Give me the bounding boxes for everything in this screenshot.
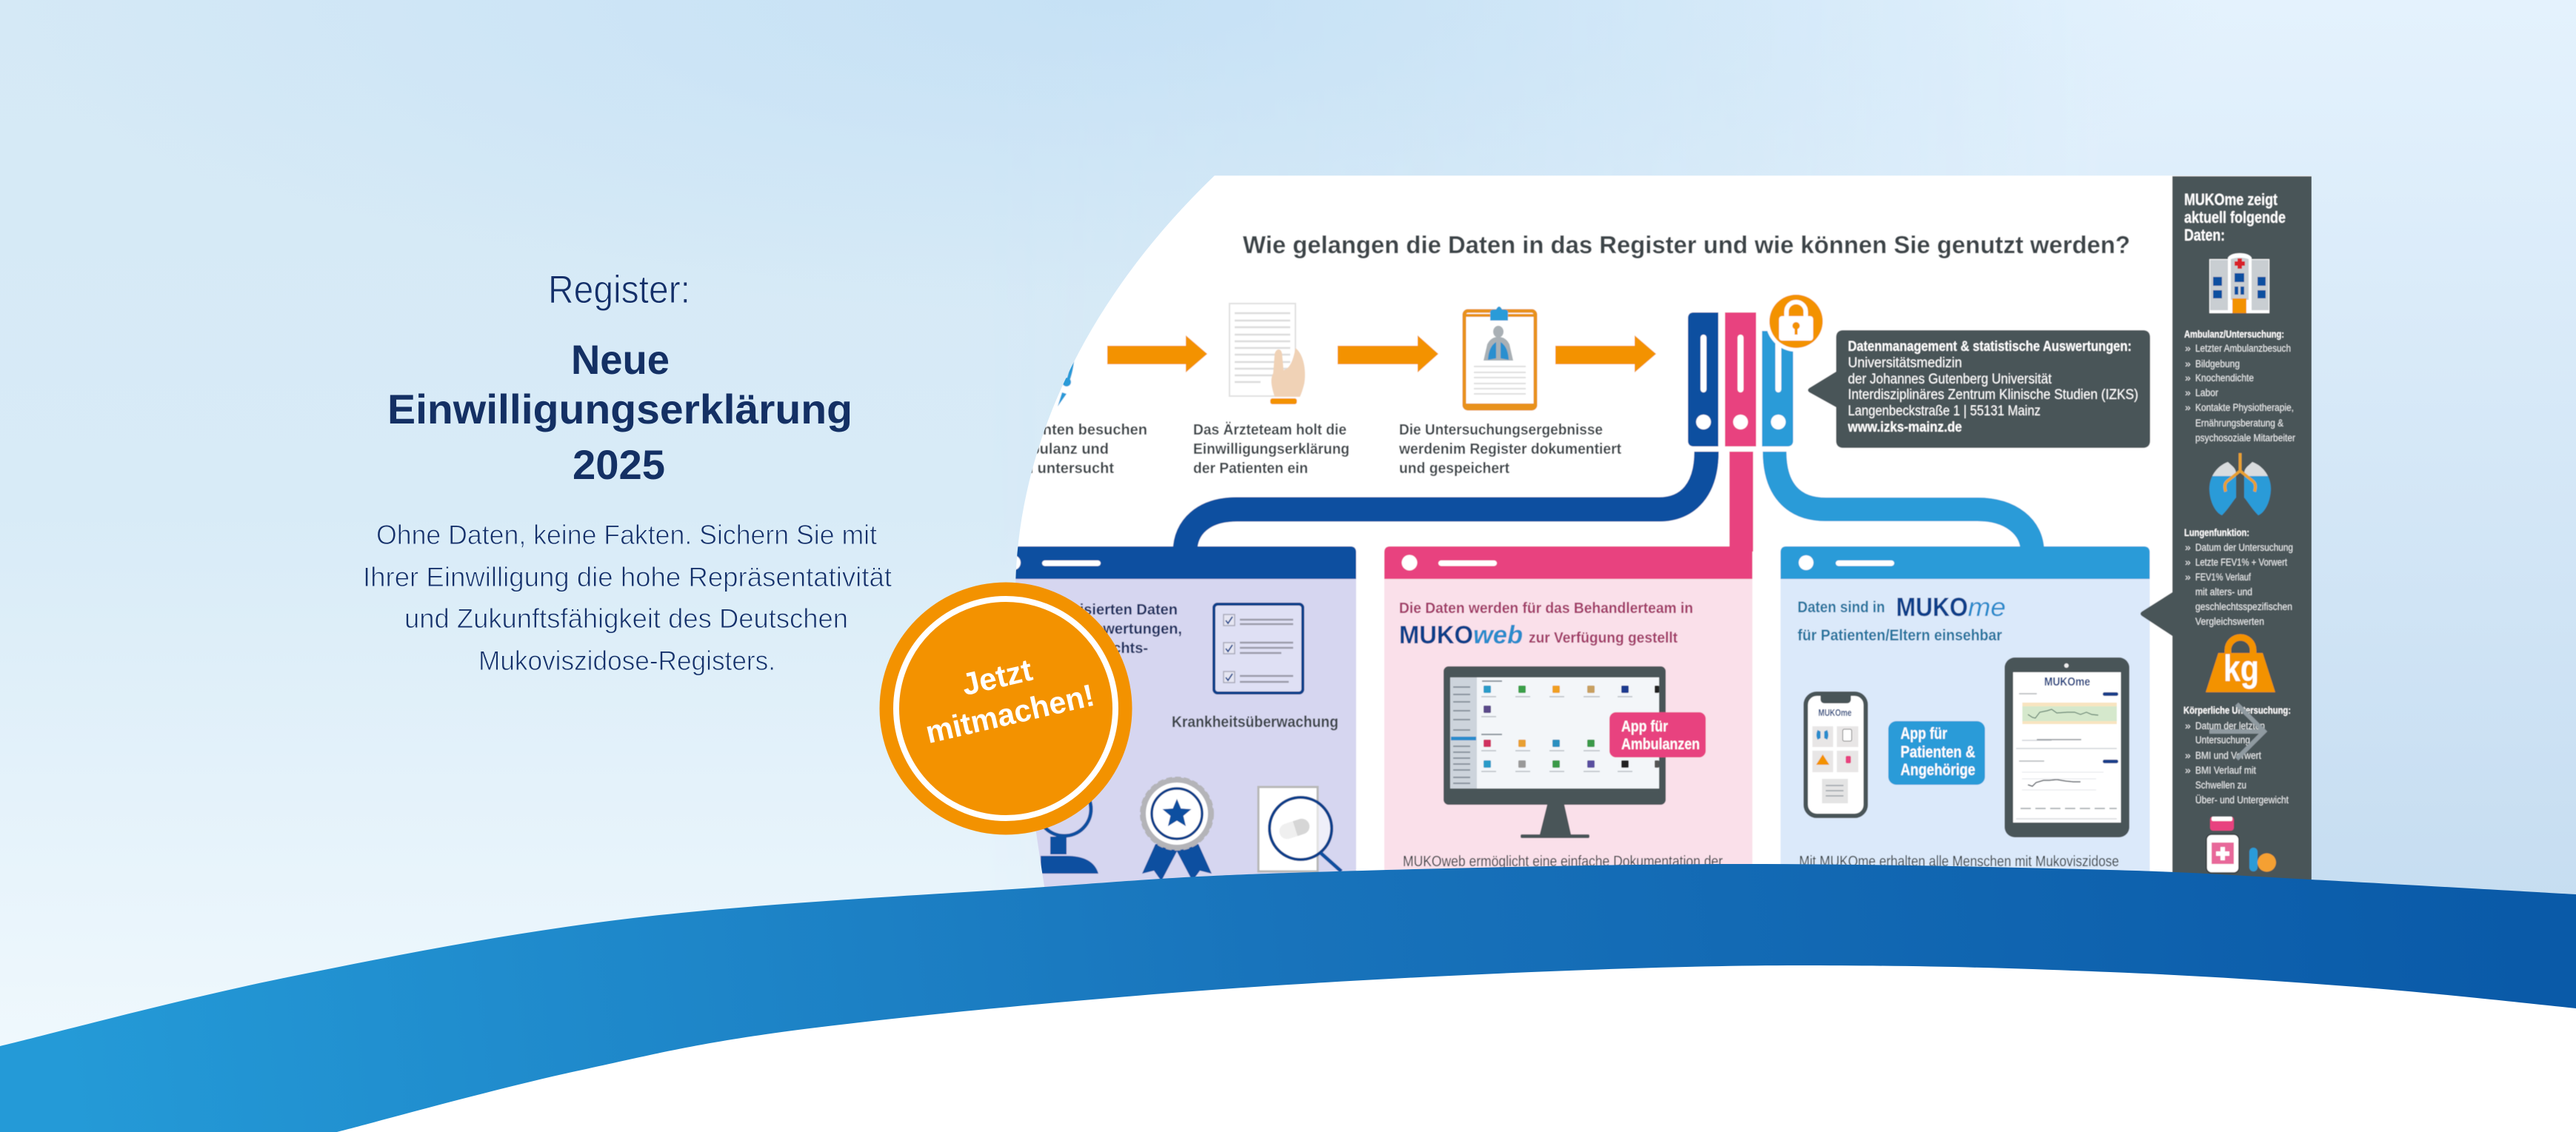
icon: patient fragment: [1058, 361, 1074, 406]
panel 3 heading: für Patienten/Eltern einsehbar: [1798, 627, 2002, 644]
logo: MUKOweb: web: [1473, 621, 1523, 649]
list: Ambulanz/Untersuchung: Ernährungsberatung &: [2195, 417, 2284, 429]
callout: App für Patienten & Angehörige: [1889, 721, 1985, 785]
list: Körperliche Untersuchung: BMI und Vorwert: [2195, 749, 2261, 761]
body text MUKOme: Mit MUKOme erhalten alle Menschen mit Mukoviszidose: [1799, 854, 2119, 870]
arrow 2: [1338, 335, 1438, 372]
icon: document with magnifier: [1258, 787, 1341, 871]
callout: data management: www.izks-mainz.de: [1847, 420, 1962, 435]
caption step 1: [1031, 423, 1147, 474]
icon: clipboard with lungs: [1464, 307, 1535, 409]
callout: data management: Universitätsmedizin: [1848, 355, 1962, 371]
callout: data management: der Johannes Gutenberg Universität: [1848, 372, 2052, 387]
caption step 3: und gespeichert: [1399, 460, 1509, 477]
callout: data management: Interdisziplinäres Zentrum Klinische Studien (IZKS): [1848, 387, 2138, 403]
heading: Neue Einwilligungserklärung 2025: [387, 336, 852, 488]
sidebar heading: MUKOme zeigt: [2184, 190, 2278, 209]
panel 2 heading: [1399, 600, 1693, 646]
icon: checklist: [1214, 604, 1303, 693]
connector: blue: [1185, 452, 1706, 552]
label: Krankheitsüberwachung: Krankheitsüberwachung: [1172, 714, 1338, 731]
sticker: Jetzt mitmachen: mitmachen!: [922, 677, 1098, 750]
eyebrow: Register: Register:: [548, 268, 690, 312]
list: Ambulanz/Untersuchung: Letzter Ambulanzbesuch: [2195, 342, 2291, 354]
callout: App für Ambulanzen: App für: [1621, 718, 1668, 735]
list: Lungenfunktion: »: [2185, 541, 2191, 553]
callout: data management: Datenmanagement & statistische Auswertungen:: [1848, 339, 2132, 355]
list: Lungenfunktion: FEV1% Verlauf: [2195, 571, 2251, 583]
body text MUKOweb: MUKOweb ermöglicht eine einfache Dokumentation der: [1403, 854, 1723, 870]
sticker: Jetzt mitmachen: Jetzt: [958, 652, 1035, 702]
logo: MUKOweb: MUKO: [1399, 621, 1473, 649]
caption step 2: Das Ärzteteam holt die: [1193, 421, 1347, 438]
list: Körperliche Untersuchung: Datum der letzten: [2195, 720, 2265, 731]
caption step 3: werdenim Register dokumentiert: [1398, 441, 1621, 458]
icon: binders: [1688, 312, 1793, 446]
icon: medal: [1141, 777, 1213, 881]
callout: App für Patienten & Angehörige: App für: [1901, 724, 1947, 743]
icon: kg weight: kg: [2223, 648, 2259, 689]
list: Ambulanz/Untersuchung: Bildgebung: [2195, 358, 2240, 369]
list: Ambulanz/Untersuchung: Knochendichte: [2195, 372, 2254, 384]
caption step 1: Patienten besuchen: [1007, 422, 1147, 438]
panel 2 heading: zur Verfügung gestellt: [1529, 630, 1678, 646]
sidebar heading: Daten:: [2184, 226, 2225, 244]
list: Lungenfunktion: Letzte FEV1% + Vorwert: [2195, 556, 2287, 568]
list: Ambulanz/Untersuchung: psychosoziale Mitarbeiter: [2195, 432, 2295, 443]
heading: Neue Einwilligungserklärung 2025: Einwilligungserklärung: [387, 386, 852, 432]
caption step 3: Die Untersuchungsergebnisse: [1399, 422, 1603, 438]
list: Ambulanz/Untersuchung: Kontakte Physiotherapie,: [2195, 401, 2294, 413]
list: Ambulanz/Untersuchung: »: [2185, 386, 2191, 398]
panel: Krankheitsüberwachung: [1015, 546, 1357, 887]
icon: kg weight: [2206, 637, 2275, 692]
icon: signed document with hand: [1229, 304, 1305, 404]
sidebar heading: aktuell folgende: [2184, 208, 2286, 227]
arrow 1: [1107, 335, 1207, 372]
list: Lungenfunktion: »: [2185, 556, 2191, 568]
callout: App für Patienten & Angehörige: Angehörige: [1901, 760, 1975, 779]
icon: hospital: [2209, 253, 2269, 313]
callout: App für Ambulanzen: [1609, 712, 1706, 757]
callout: App für Patienten & Angehörige: Patienten &: [1901, 743, 1975, 761]
panel: MUKOweb: [1384, 546, 1752, 903]
sticker: Jetzt mitmachen: [880, 582, 1132, 835]
infographic title: Wie gelangen die Daten in das Register und wie können Sie genutzt werden?: [1243, 231, 2130, 258]
list: Körperliche Untersuchung: »: [2185, 720, 2191, 731]
heading: Neue Einwilligungserklärung 2025: 2025: [573, 441, 665, 488]
callout: data management: [1808, 330, 2150, 448]
connector: teal: [1775, 452, 2032, 552]
panel 3 heading: Daten sind in: [1798, 599, 1885, 616]
icon: phone: [1806, 694, 1866, 816]
paragraph: Ohne Daten, keine Fakten. Sichern Sie mit: [376, 520, 878, 550]
sidebar heading: [2184, 190, 2286, 244]
caption step 1: werden untersucht: [981, 460, 1114, 477]
panel: MUKOme: [1781, 546, 2149, 903]
icon: slider arrow: [2209, 704, 2264, 759]
callout: data management: Langenbeckstraße 1 | 55131 Mainz: [1848, 403, 2041, 419]
list: Lungenfunktion: Lungenfunktion:: [2184, 526, 2249, 538]
panel 3 heading: [1798, 599, 2002, 644]
logo: MUKOme: MUKO: [1896, 593, 1968, 622]
list: Ambulanz/Untersuchung: »: [2185, 358, 2191, 369]
panel text: anonymisierten Daten: [1023, 602, 1178, 618]
list: Ambulanz/Untersuchung: Ambulanz/Untersuchung:: [2184, 328, 2284, 340]
list: Körperliche Untersuchung: BMI Verlauf mit: [2195, 764, 2256, 776]
caption step 1: die Ambulanz und: [982, 441, 1109, 458]
panel text: [1080, 603, 1182, 653]
paragraph: Mukoviszidose-Registers.: [478, 646, 775, 676]
logo: MUKOweb: [1399, 621, 1523, 649]
list: Körperliche Untersuchung: [2183, 704, 2291, 806]
icon: tablet: [2004, 657, 2129, 837]
list: Lungenfunktion: mit alters- und: [2195, 586, 2252, 597]
paragraph: und Zukunftsfähigkeit des Deutschen: [404, 603, 848, 634]
list: Körperliche Untersuchung: Über- und Untergewicht: [2195, 793, 2289, 806]
connector: pink: [1729, 452, 1753, 552]
icon: medicine bottle and pills: [2206, 817, 2276, 873]
list: Lungenfunktion: geschlechtsspezifischen: [2195, 600, 2292, 612]
paragraph: [363, 520, 892, 676]
infographic image clipped by arc: [981, 175, 2312, 903]
panel 2 heading: Die Daten werden für das Behandlerteam in: [1399, 600, 1693, 617]
list: Körperliche Untersuchung: Körperliche Untersuchung:: [2183, 704, 2291, 716]
icon: phone: MUKOme: [1818, 707, 1852, 718]
caption step 2: der Patienten ein: [1193, 460, 1308, 477]
icon: lungs: [2207, 453, 2274, 518]
list: Körperliche Untersuchung: »: [2185, 764, 2191, 776]
list: Lungenfunktion: Datum der Untersuchung: [2195, 541, 2293, 553]
caption step 3: [1398, 422, 1621, 477]
heading: Neue Einwilligungserklärung 2025: Neue: [571, 336, 670, 383]
icon: stethoscope person: [1040, 801, 1099, 874]
logo: MUKOme: me: [1968, 593, 2006, 622]
list: Ambulanz/Untersuchung: Labor: [2195, 386, 2218, 398]
icon: tablet: MUKOme: [2044, 676, 2090, 689]
list: Lungenfunktion: [2184, 526, 2293, 627]
panel text: für Auswertungen,: [1052, 621, 1182, 637]
list: Ambulanz/Untersuchung: [2184, 328, 2295, 443]
list: Ambulanz/Untersuchung: »: [2185, 401, 2191, 413]
list: Ambulanz/Untersuchung: »: [2185, 342, 2191, 354]
list: Lungenfunktion: Vergleichswerten: [2195, 615, 2264, 627]
panel text: Berichts-: [1084, 640, 1148, 657]
list: Körperliche Untersuchung: »: [2185, 749, 2191, 761]
arrow 3: [1555, 335, 1656, 372]
list: Ambulanz/Untersuchung: »: [2185, 372, 2191, 384]
callout: App für Ambulanzen: Ambulanzen: [1621, 736, 1700, 753]
wave: white footer: [337, 965, 2576, 1132]
text block: register intro: [363, 268, 892, 676]
panel: sidebar MUKOme data: [2140, 176, 2312, 896]
list: Lungenfunktion: »: [2185, 571, 2191, 583]
caption step 2: [1193, 421, 1349, 477]
list: Körperliche Untersuchung: Schwellen zu: [2195, 779, 2246, 791]
paragraph: Ihrer Einwilligung die hohe Repräsentativität: [363, 562, 892, 592]
wave: blue band: [0, 864, 2576, 1132]
caption step 2: Einwilligungserklärung: [1193, 441, 1349, 458]
icon: padlock: [1767, 294, 1823, 352]
icon: monitor: [1444, 666, 1666, 838]
list: Körperliche Untersuchung: Untersuchung: [2195, 734, 2250, 746]
